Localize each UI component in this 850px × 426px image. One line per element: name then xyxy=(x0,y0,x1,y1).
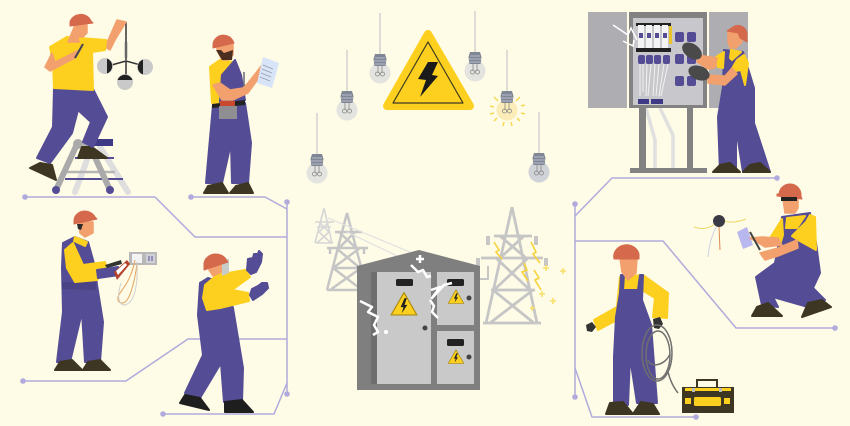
stepladder xyxy=(52,139,128,194)
toolbox xyxy=(682,380,734,413)
bulb 4 xyxy=(464,11,486,82)
plug sockets xyxy=(675,32,696,86)
circuit lines: left xyxy=(20,194,290,417)
worker with face shield xyxy=(180,251,268,412)
large right tower xyxy=(478,207,546,323)
white sparks xyxy=(360,255,452,335)
hanging light bulbs xyxy=(306,11,550,184)
substation cabinet xyxy=(357,250,480,390)
tower sparks xyxy=(494,242,566,311)
worker on ladder changing lamp xyxy=(30,14,153,194)
kneeling worker xyxy=(750,184,831,317)
lower door xyxy=(437,331,474,384)
ceiling lamp xyxy=(97,22,153,90)
wall socket xyxy=(129,252,157,265)
warning sign xyxy=(387,34,470,106)
worker testing socket with meter xyxy=(55,211,157,370)
circuit lines: right xyxy=(572,175,838,420)
breakers xyxy=(636,23,672,64)
wall socket and wires xyxy=(694,215,753,257)
bulb 2 xyxy=(336,50,358,120)
bulb 6 xyxy=(528,112,550,182)
transmission towers xyxy=(315,207,546,323)
glowing bulb xyxy=(490,50,525,126)
worker with checklist xyxy=(204,35,279,193)
small far tower xyxy=(315,208,334,243)
middle tower xyxy=(327,213,368,290)
cable coil xyxy=(642,325,678,393)
main door xyxy=(377,272,431,384)
switchboard xyxy=(588,12,748,173)
upper door xyxy=(437,272,474,325)
bulb 1 xyxy=(370,13,390,84)
bulb 3 xyxy=(306,113,328,184)
power lines xyxy=(328,218,410,262)
worker at switchboard xyxy=(679,25,770,172)
arcs xyxy=(613,25,637,46)
worker with cable xyxy=(586,245,678,414)
